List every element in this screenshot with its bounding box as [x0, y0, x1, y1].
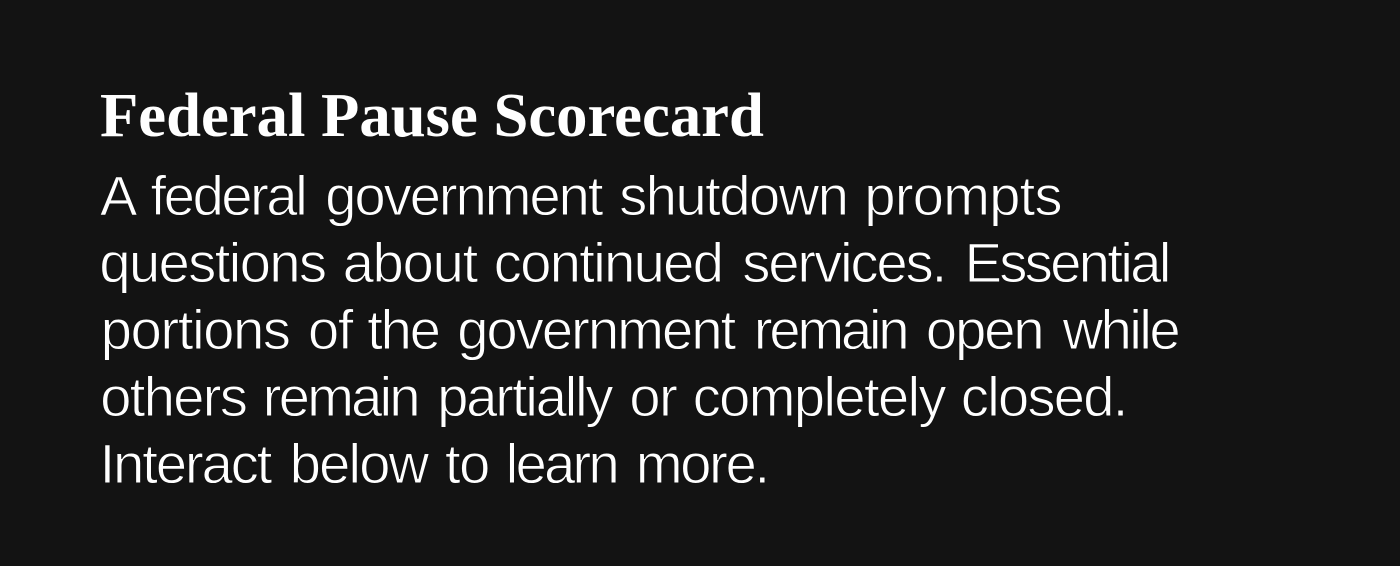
- text block: intro paragraph: the: [367, 298, 439, 361]
- text block: intro paragraph: about: [343, 231, 477, 294]
- text block: intro paragraph: learn: [506, 432, 617, 495]
- text block: intro paragraph: Essential: [965, 231, 1169, 294]
- title: Federal Pause Scorecard: [100, 80, 764, 150]
- text block: intro paragraph: more.: [636, 432, 768, 495]
- text block: intro paragraph: partially: [437, 365, 611, 428]
- text block: intro paragraph: shutdown: [619, 164, 847, 227]
- text block: intro paragraph: closed.: [961, 365, 1127, 428]
- text block: intro paragraph: others: [100, 365, 246, 428]
- text block: intro paragraph: Interact: [100, 432, 270, 495]
- text block: intro paragraph: of: [308, 298, 352, 361]
- text block: intro paragraph: to: [445, 432, 489, 495]
- text block: intro paragraph: questions: [99, 231, 325, 294]
- text block: intro paragraph: below: [290, 432, 427, 495]
- text block: intro paragraph: prompts: [864, 164, 1062, 227]
- text block: intro paragraph: government: [325, 164, 601, 227]
- text block: intro paragraph: services.: [742, 231, 945, 294]
- text block: intro paragraph: remain: [263, 365, 418, 428]
- text block: intro paragraph: remain: [754, 298, 906, 361]
- text block: intro paragraph: [99, 164, 1178, 495]
- text block: intro paragraph: federal: [151, 164, 305, 227]
- text block: intro paragraph: completely: [693, 365, 945, 428]
- text block: intro paragraph: government: [457, 298, 734, 361]
- text block: intro paragraph: continued: [494, 231, 722, 294]
- text block: intro paragraph: or: [629, 365, 676, 428]
- text block: intro paragraph: while: [1063, 298, 1178, 361]
- text block: intro paragraph: portions: [101, 298, 290, 361]
- text block: intro paragraph: open: [926, 298, 1043, 361]
- text block: intro paragraph: A: [100, 164, 137, 227]
